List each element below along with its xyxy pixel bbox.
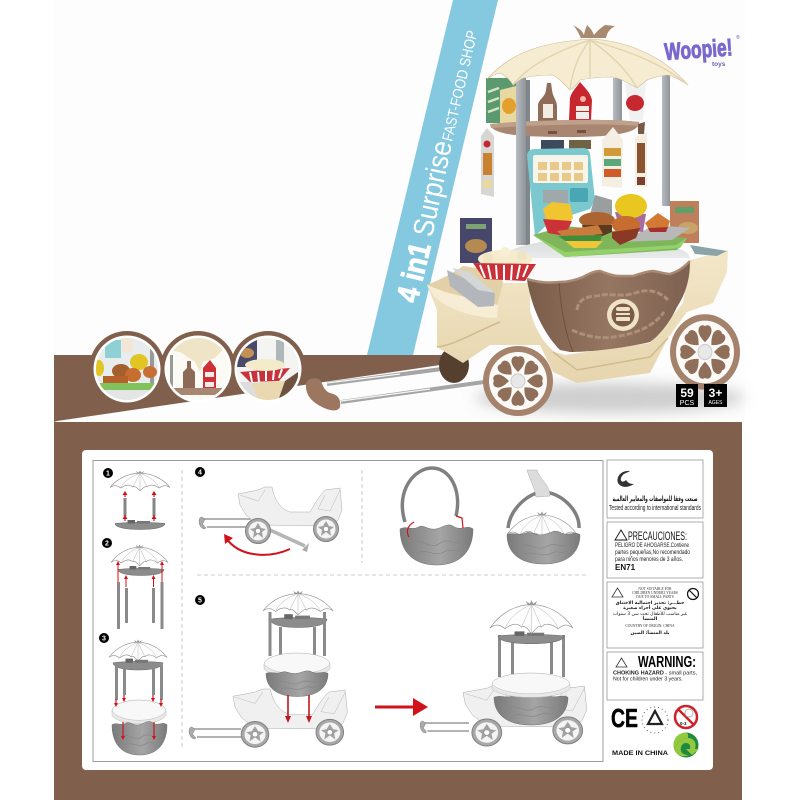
spanish precautions panel — [607, 522, 703, 578]
age badge — [704, 384, 727, 407]
ribbon 4 in 1: 4 in1 — [390, 239, 438, 306]
multilingual warning panel — [607, 582, 703, 648]
ribbon FAST-FOOD SHOP: FAST-FOOD SHOP — [439, 29, 481, 143]
blue ribbon — [367, 0, 498, 355]
spanish precautions panel: EN71 — [615, 563, 636, 572]
hanging tag centre — [602, 127, 623, 188]
pole back left — [526, 80, 530, 245]
no under three symbol — [675, 706, 697, 728]
step 4: 4 — [198, 470, 202, 476]
popcorn basket — [473, 247, 536, 281]
pieces badge: PCS — [680, 400, 695, 407]
step 3: 3 — [102, 636, 106, 642]
choking warning panel: Not for children under 3 years. — [613, 676, 683, 682]
shelf — [490, 120, 639, 137]
bottom brown panel — [54, 422, 742, 800]
basket closed — [507, 470, 580, 564]
circle 1: food tray — [92, 331, 162, 402]
fries — [543, 202, 573, 236]
red ketchup bottle — [569, 82, 592, 120]
green pie box — [486, 78, 516, 123]
arrow to assembled — [375, 698, 428, 716]
multilingual warning panel: CHILDREN UNDER3 YEARS — [632, 591, 678, 595]
step 1 — [103, 468, 170, 530]
step 3 — [99, 633, 167, 755]
pole mid — [613, 78, 622, 126]
english standards line: Tested according to international standards — [609, 505, 701, 512]
white lid — [504, 238, 690, 284]
top white product area — [54, 0, 745, 422]
rear hidden wheel — [439, 347, 469, 383]
burger 1 — [579, 212, 615, 237]
pieces badge: 59 — [680, 386, 694, 400]
bottle label — [543, 104, 553, 118]
instruction frame — [93, 460, 603, 762]
brown sauce bottle — [538, 83, 557, 123]
cart pull handle — [306, 367, 484, 410]
product: food cart — [306, 25, 745, 416]
made in china: MADE IN CHINA — [612, 750, 668, 757]
recycle symbol — [642, 707, 668, 733]
spanish precautions panel: PRECAUCIONES: — [628, 529, 687, 543]
hanging card left — [481, 128, 494, 197]
dark packs behind register — [541, 140, 591, 149]
drink cup — [625, 82, 646, 120]
spanish precautions panel: partes pequeñas,No recomendado — [615, 549, 690, 556]
standards panel — [607, 460, 703, 518]
CE mark: CE — [611, 703, 638, 733]
multilingual warning panel: يحتوي على أجزاء صغيرة — [623, 604, 677, 611]
white instruction card — [82, 450, 713, 770]
rear wheel — [670, 314, 740, 390]
grey machine behind food — [590, 195, 612, 215]
arabic standards line: صنعت وفقا للمواصفات والمعايير العالمية — [612, 495, 698, 503]
multilingual warning panel: المنشأ — [643, 615, 658, 622]
age badge: 3+ — [709, 386, 722, 400]
cream cart body — [427, 250, 728, 383]
multilingual warning panel: DUE TO SMALL PARTS — [636, 595, 674, 599]
assembled cart line art — [420, 600, 587, 746]
step 1: 1 — [106, 470, 110, 478]
multilingual warning panel: بلد المنشأ: الصين — [631, 629, 670, 636]
standards logo — [618, 471, 634, 487]
choking warning panel: WARNING: — [638, 654, 696, 671]
circle 2: sauce bottles — [162, 331, 233, 402]
choking warning panel: CHOKING HAZARD - small parts, — [613, 670, 697, 676]
corn bowl — [615, 194, 647, 232]
sandwich — [557, 225, 603, 248]
choking warning panel — [607, 652, 703, 700]
multilingual warning panel: NOT SUITABLE FOR — [638, 587, 672, 591]
spanish precautions panel: para niños menores de 3 años. — [615, 556, 683, 563]
age badge: AGES — [709, 400, 723, 406]
basket open — [400, 468, 473, 565]
flyer on right — [690, 245, 727, 256]
step 5 exploded — [189, 590, 347, 747]
detail circles — [89, 331, 306, 407]
brown bowl — [527, 261, 690, 352]
multilingual warning panel: خطـــر: تحذير احتمالية الاختناق — [616, 601, 684, 606]
tongs — [447, 268, 495, 307]
front bucket lip — [427, 285, 498, 318]
bucket interior shading — [427, 266, 503, 305]
umbrella canopy — [487, 25, 688, 90]
step 4 — [195, 467, 342, 555]
multilingual warning panel: غير مناسب للأطفال تحت سن 3 سنوات — [613, 610, 688, 617]
tray and food — [533, 194, 690, 257]
wax paper — [620, 225, 690, 242]
brand logo: ® — [736, 34, 740, 41]
brand logo: toys — [712, 61, 726, 68]
front left pole — [516, 78, 526, 245]
green dot — [673, 732, 699, 758]
tan pie box — [670, 201, 699, 243]
ribbon Surprise: Surprise — [408, 138, 459, 239]
burger badge — [607, 299, 639, 331]
front wheel — [483, 346, 553, 416]
body crease — [437, 322, 668, 370]
step 2: 2 — [105, 540, 109, 548]
brand logo: Woopie! — [664, 34, 733, 66]
floor shadow — [475, 383, 745, 413]
no small parts icon — [688, 588, 698, 600]
circle 3: popcorn — [233, 331, 304, 400]
pieces badge — [676, 384, 698, 407]
sandwich slice — [645, 213, 670, 232]
multilingual warning panel: COUNTRY OF ORIGIN: CHINA — [625, 624, 675, 628]
cash register — [527, 148, 595, 236]
front right pole — [662, 74, 670, 206]
purple pie box — [460, 218, 492, 263]
hanging tag right — [635, 122, 647, 187]
spanish precautions panel: PELIGRO DE AHOGARSE.Contiene — [615, 542, 689, 549]
burger 2 — [612, 216, 640, 245]
brown diagonal band — [54, 355, 460, 422]
no under three symbol: 0-3 — [680, 721, 687, 726]
step 2 — [102, 538, 168, 629]
step 5 exploded: 5 — [198, 598, 202, 604]
